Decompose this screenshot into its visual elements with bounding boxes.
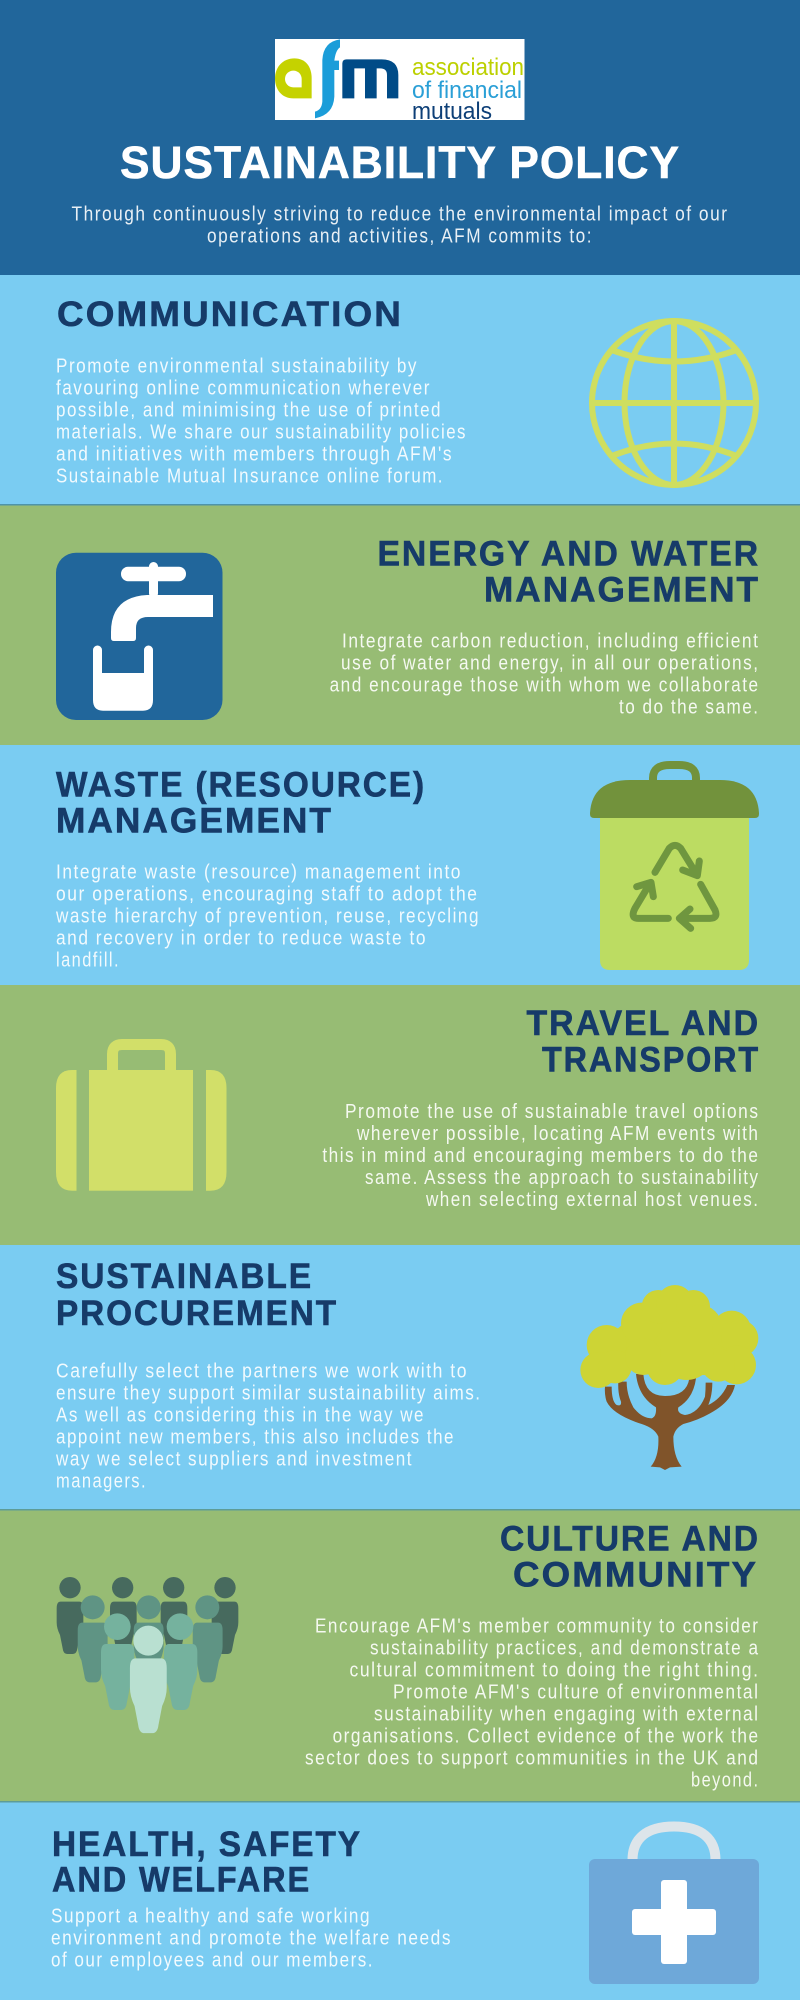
text: waste — [55, 861, 480, 972]
heading: culture and community: CULTURE AND — [500, 1520, 760, 1559]
text: communication: and initiatives with members through AFM's — [56, 443, 453, 466]
text: procurement: appoint new members, this also includes the — [56, 1426, 455, 1449]
title: SUSTAINABILITY POLICY — [120, 137, 680, 188]
logo: AFM association of financial mutuals: mutuals — [412, 98, 492, 125]
heading: travel and transport — [526, 1004, 760, 1080]
text: communication — [56, 355, 467, 488]
panel: health, safety and welfare — [0, 1801, 800, 2000]
icon: first aid kit — [589, 1826, 759, 1984]
text: communication: materials. We share our sustainability policies — [56, 421, 467, 444]
text: procurement — [55, 1360, 481, 1493]
text: travel — [322, 1100, 760, 1211]
text: energy and water: to do the same. — [619, 696, 760, 719]
text: health: of our employees and our members. — [51, 1949, 374, 1972]
panel: header — [0, 0, 800, 275]
text: procurement: managers. — [56, 1470, 147, 1493]
text: communication: Sustainable Mutual Insurance online forum. — [56, 465, 444, 488]
heading: culture and community: COMMUNITY — [513, 1556, 758, 1595]
heading: travel and transport: TRANSPORT — [542, 1041, 760, 1080]
text: waste: Integrate waste (resource) management into — [56, 861, 462, 884]
intro text: operations and activities, AFM commits to: — [207, 225, 593, 248]
text: health — [51, 1905, 452, 1972]
text: health: Support a healthy and safe working — [51, 1905, 371, 1928]
heading: waste management: MANAGEMENT — [56, 802, 333, 841]
panel: energy and water management — [0, 504, 800, 745]
text: communication: Promote environmental sustainability by — [56, 355, 418, 378]
panel: travel and transport — [0, 985, 800, 1245]
heading: waste management — [56, 766, 426, 841]
heading: waste management: WASTE (RESOURCE) — [56, 766, 426, 805]
text: procurement: As well as considering this in the way we — [56, 1404, 425, 1427]
logo: AFM association of financial mutuals: of financial — [412, 77, 522, 104]
heading: sustainable procurement: SUSTAINABLE — [56, 1257, 313, 1296]
icon: recycling bin — [590, 765, 759, 970]
text: communication: favouring online communication wherever — [56, 377, 431, 400]
heading: culture and community — [500, 1520, 760, 1595]
heading: communication: COMMUNICATION — [57, 295, 403, 334]
text: energy and water — [330, 630, 760, 719]
heading: health, safety and welfare — [52, 1825, 362, 1900]
text: waste: our operations, encouraging staff to adopt the — [56, 883, 478, 906]
text: culture — [305, 1615, 760, 1792]
icon: tap and glass — [56, 553, 222, 720]
heading: energy and water management — [378, 535, 760, 610]
heading: health, safety and welfare: HEALTH, SAFETY — [52, 1825, 362, 1864]
text: procurement: ensure they support similar sustainability aims. — [56, 1382, 482, 1405]
icon: suitcase — [56, 1044, 226, 1191]
heading: sustainable procurement — [56, 1257, 338, 1333]
heading: sustainable procurement: PROCUREMENT — [56, 1294, 338, 1333]
icon: group of people — [57, 1577, 238, 1733]
text: waste: and recovery in order to reduce waste to — [56, 927, 427, 950]
text: procurement: Carefully select the partners we work with to — [56, 1360, 468, 1383]
panel: communication — [0, 275, 800, 505]
panel: sustainable procurement — [0, 1245, 800, 1510]
text: waste: waste hierarchy of prevention, reuse, recycling — [55, 905, 480, 928]
heading: health, safety and welfare: AND WELFARE — [52, 1861, 311, 1900]
panel: culture and community — [0, 1509, 800, 1802]
text: procurement: way we select suppliers and investment — [55, 1448, 413, 1471]
intro text — [72, 203, 728, 248]
icon: globe — [592, 321, 756, 485]
logo: AFM association of financial mutuals: association — [412, 54, 524, 81]
text: culture: beyond. — [691, 1769, 760, 1792]
text: health: environment and promote the welfare needs — [51, 1927, 452, 1950]
heading: energy and water management: MANAGEMENT — [484, 571, 760, 610]
panel: waste management — [0, 745, 800, 985]
text: waste: landfill. — [56, 949, 120, 972]
logo: AFM association of financial mutuals — [275, 39, 524, 125]
icon: tree — [580, 1285, 758, 1470]
heading: energy and water management: ENERGY AND WATER — [378, 535, 760, 574]
text: communication: possible, and minimising the use of printed — [56, 399, 442, 422]
heading: travel and transport: TRAVEL AND — [526, 1004, 760, 1043]
